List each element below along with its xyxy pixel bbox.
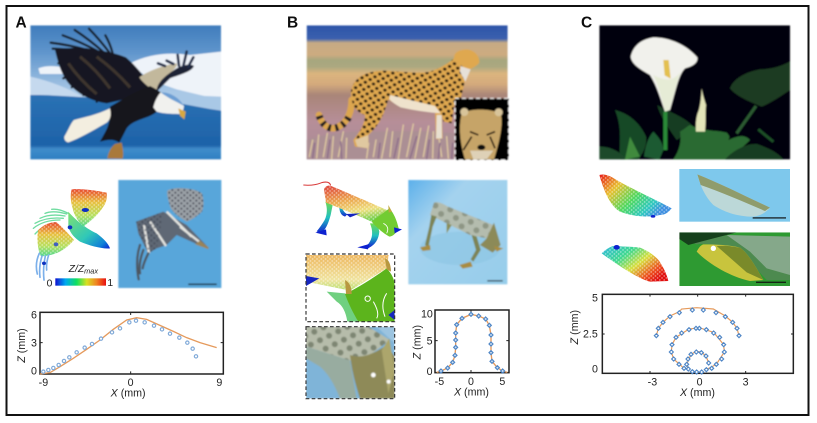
panel: C calla lily [569, 14, 793, 399]
chart: A Z vs X: X (mm) [110, 387, 146, 399]
chart: C Z vs X: 3 [743, 377, 749, 389]
heading: A: A [16, 14, 27, 32]
chart: B Z vs X: 0 [468, 376, 474, 388]
panel: A eagle [16, 14, 223, 399]
model: cheetah simulation [303, 182, 402, 249]
chart: B Z vs X: X (mm) [453, 387, 489, 399]
chart: B Z vs X [412, 308, 509, 399]
photo: bald eagle [30, 25, 221, 159]
colour bar legend: 0 [47, 278, 53, 289]
chart: B Z vs X: 5 [427, 336, 433, 348]
chart: C Z vs X: 5 [592, 292, 598, 304]
chart: A Z vs X: 6 [31, 310, 37, 322]
chart: A Z vs X [16, 310, 223, 399]
chart: C Z vs X: 2.5 [583, 328, 598, 340]
photo: cheetah [307, 25, 509, 160]
chart: A Z vs X: Z (mm) [16, 328, 28, 364]
chart: A Z vs X: 0 [31, 366, 37, 378]
chart: B Z vs X: -5 [435, 376, 444, 388]
colour bar legend: max [84, 267, 98, 276]
chart: C Z vs X [569, 292, 793, 399]
chart: C Z vs X: 0 [697, 377, 703, 389]
chart: B Z vs X: 10 [421, 308, 433, 320]
panel: B cheetah [287, 14, 509, 399]
chart: A Z vs X: 0 [128, 377, 134, 389]
inset: simulation closeup [306, 254, 395, 322]
chart: A Z vs X: 3 [31, 337, 37, 349]
model: eagle simulation [33, 189, 110, 280]
chart: A Z vs X: -9 [39, 377, 48, 389]
heading: C: C [581, 14, 592, 32]
chart: C Z vs X: X (mm) [679, 387, 715, 399]
chart: B Z vs X: Z (mm) [412, 325, 424, 360]
heading: B: B [287, 14, 298, 32]
model: leaf simulation lower [602, 245, 668, 282]
chart: C Z vs X: 0 [592, 364, 598, 376]
colour bar legend: 1 [107, 278, 113, 289]
photo: leaf robot on blue [679, 169, 790, 222]
chart: C Z vs X: -3 [648, 377, 657, 389]
inset: robot closeup [306, 327, 395, 399]
colour bar legend [47, 264, 113, 289]
chart: B Z vs X: 0 [427, 366, 433, 378]
chart: B Z vs X: 5 [499, 376, 505, 388]
colour bar legend: Z/Z [69, 264, 84, 275]
photo: leaf robot on leaf [679, 232, 790, 286]
model: leaf simulation upper [599, 174, 672, 218]
photo: calla lily [599, 25, 790, 159]
photo: cheetah robot [408, 180, 507, 284]
chart: A Z vs X: 9 [216, 377, 222, 389]
photo: eagle robot [118, 180, 221, 288]
chart: C Z vs X: Z (mm) [569, 310, 581, 345]
